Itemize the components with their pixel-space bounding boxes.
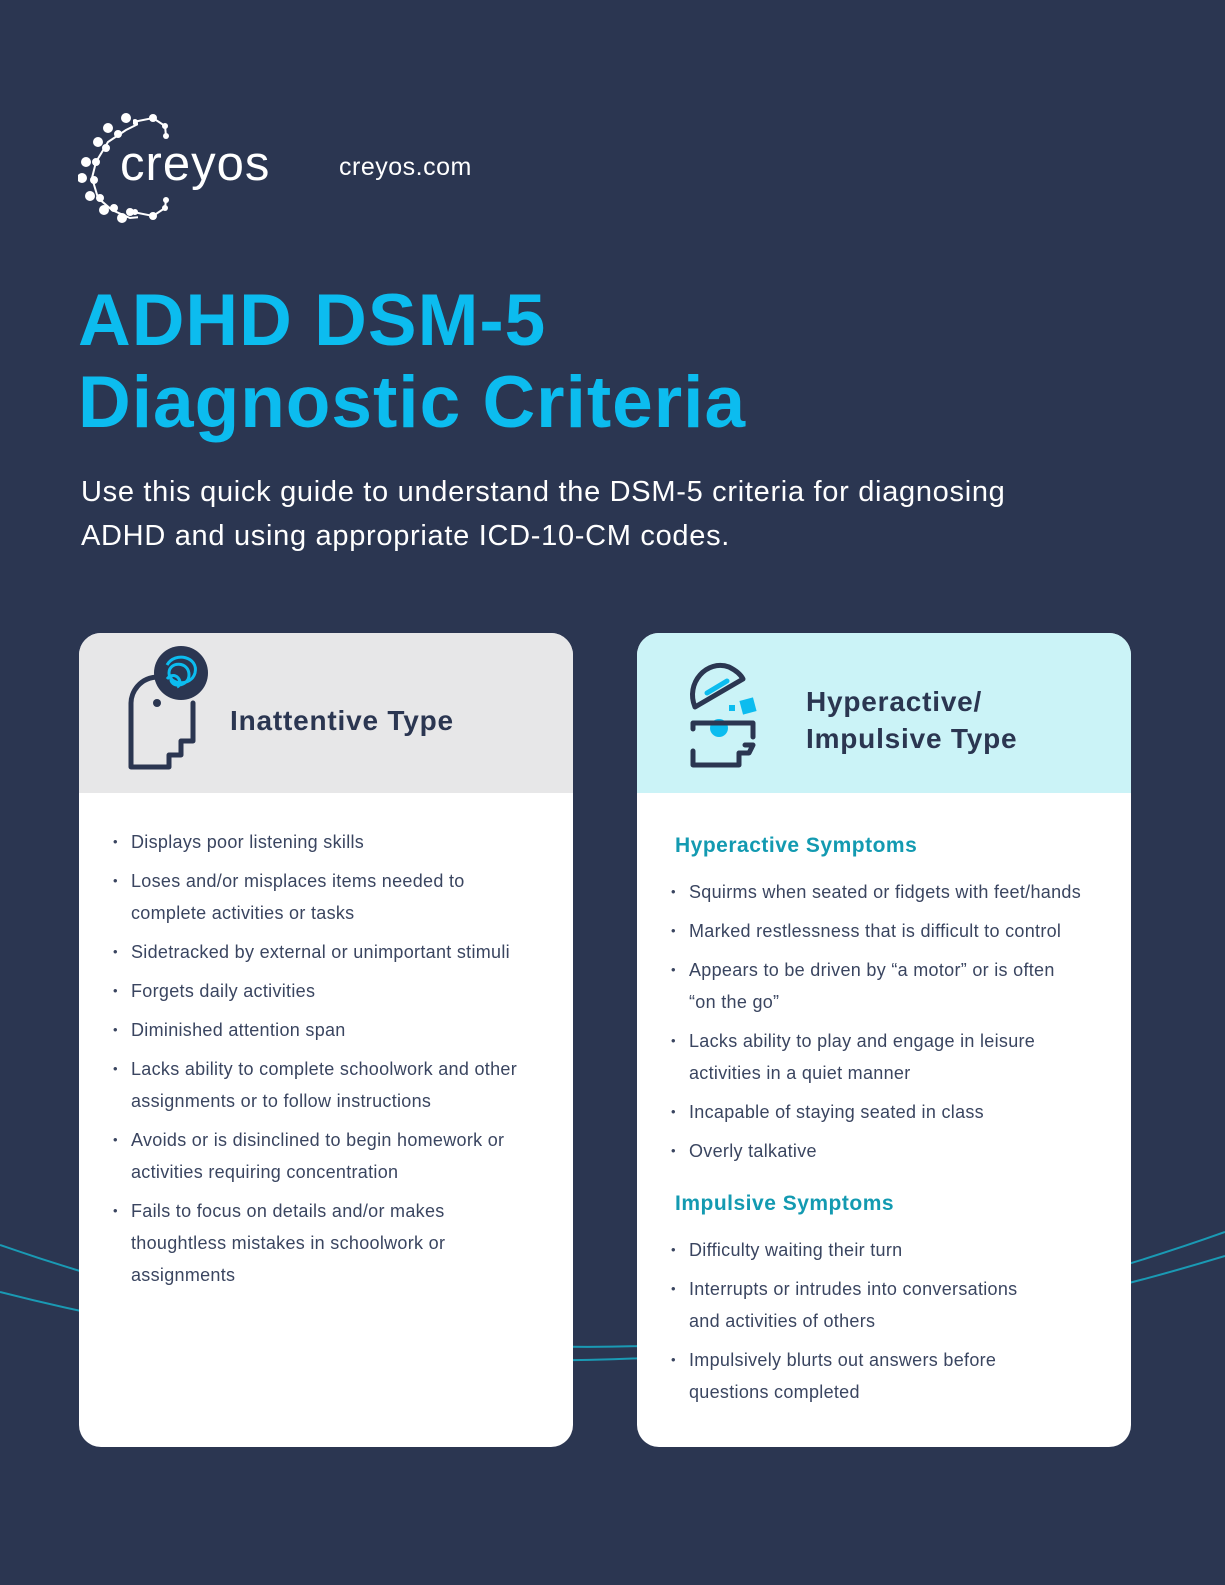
list: hyperactive symptoms: Incapable of staying seated in class [689,1102,984,1122]
list: hyperactive symptoms: Marked restlessness that is difficult to control [689,921,1061,941]
subheading: hyperactive symptoms: Hyperactive Symptoms [675,834,917,857]
website: creyos.com [339,153,472,181]
icon: head with scribble [128,646,208,770]
intro text: ADHD and using appropriate ICD-10-CM codes. [81,520,730,552]
list: hyperactive symptoms: activities in a quiet manner [689,1063,911,1083]
title: Diagnostic Criteria [78,362,746,443]
subheading: impulsive symptoms: Impulsive Symptoms [675,1192,894,1215]
list: inattentive symptoms: Diminished attention span [131,1020,346,1040]
list: hyperactive symptoms: Lacks ability to play and engage in leisure [689,1031,1035,1051]
list: impulsive symptoms: and activities of others [689,1311,875,1331]
list: inattentive symptoms: complete activities or tasks [131,903,354,923]
logo [78,113,270,223]
list: inattentive symptoms: thoughtless mistakes in schoolwork or [131,1233,445,1253]
heading: hyperactive [806,686,1017,754]
list: impulsive symptoms: Difficulty waiting their turn [689,1240,902,1260]
list: hyperactive symptoms: Squirms when seated or fidgets with feet/hands [689,882,1081,902]
list: hyperactive symptoms [672,882,1081,1161]
list: inattentive symptoms: assignments or to follow instructions [131,1091,431,1111]
list: inattentive symptoms: Avoids or is disinclined to begin homework or [131,1130,504,1150]
title [78,280,746,443]
list: hyperactive symptoms: “on the go” [689,992,779,1012]
panel: inattentive [79,633,573,1447]
list: inattentive symptoms: Fails to focus on details and/or makes [131,1201,445,1221]
intro text [81,476,1006,552]
list: inattentive symptoms: Sidetracked by external or unimportant stimuli [131,942,510,962]
list: inattentive symptoms [114,832,517,1285]
panel: hyperactive [637,633,1131,1447]
icon: open head [690,662,756,768]
logo: creyos [120,137,270,191]
list: inattentive symptoms: assignments [131,1265,235,1285]
header: hyperactive [637,633,1131,793]
list: inattentive symptoms: Loses and/or misplaces items needed to [131,871,465,891]
list: inattentive symptoms: Lacks ability to complete schoolwork and other [131,1059,517,1079]
list: hyperactive symptoms: Appears to be driven by “a motor” or is often [689,960,1055,980]
intro text: Use this quick guide to understand the DSM-5 criteria for diagnosing [81,476,1006,508]
list: hyperactive symptoms: Overly talkative [689,1141,817,1161]
list: inattentive symptoms: Forgets daily activities [131,981,315,1001]
list: impulsive symptoms: Impulsively blurts out answers before [689,1350,996,1370]
header: inattentive [79,633,573,793]
heading: hyperactive: Impulsive Type [806,723,1017,754]
list: inattentive symptoms: Displays poor listening skills [131,832,364,852]
heading: inattentive: Inattentive Type [230,705,454,736]
list: impulsive symptoms [672,1240,1017,1402]
list: impulsive symptoms: Interrupts or intrudes into conversations [689,1279,1017,1299]
list: impulsive symptoms: questions completed [689,1382,860,1402]
heading: hyperactive: Hyperactive/ [806,686,982,717]
title: ADHD DSM-5 [78,280,546,361]
list: inattentive symptoms: activities requiring concentration [131,1162,398,1182]
